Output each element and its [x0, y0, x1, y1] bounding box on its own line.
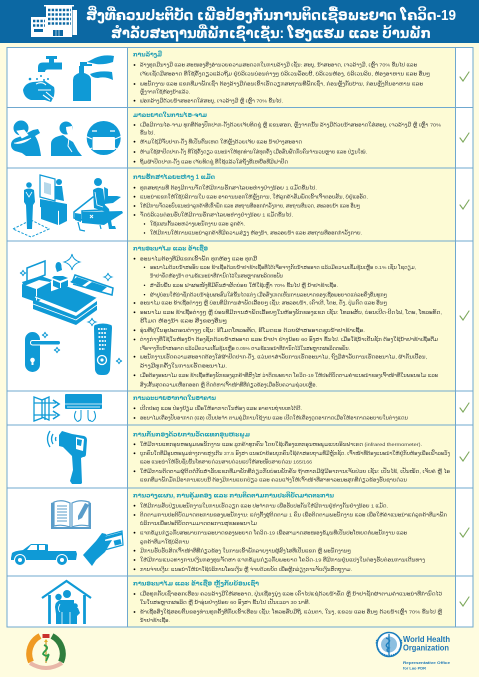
- bullet list: ໃຫ້ມີການແນວທາງການເງິນກອງທຸນຈັດຫາ ແຈກຂໍ້ມູນກ່ຽວກັບພະຍາດ ໂຄວິດ-19 ທີ່ມີການຢຸ່ນແປງໃນຕ່ອງຮັບຕ່ອນການເດີນທາງ: [140, 557, 426, 564]
- bullet list: [134, 502, 447, 573]
- bullet list: ບໍລິການເພື່ອປະຕິບັດຕາມມາດຕະການສຸຂະອະນາໄມ: [140, 519, 258, 527]
- bullet list: ແຂກທີ່ມາພັກມັກມີອາການແບບນີ້ ຕ້ອງມີການແຍກປ່ຽວ ແລະ ຄວນແຈ້ງໃຫ້ເຈົ້າໜ້າທີ່ສາທາລະນະສຸກທີ່ກ່ຽວຂ້ອງຮັບຊາບດ່ວນ: [140, 477, 407, 484]
- bullet list: ໃຫ້ມີການຈັດລະບົບແນະນຳລູກຄ້າທີ່ເຂົ້າພັກ ແລະ ສະຖານທີ່ອອກກຳລັງກາຍ, ສະຖານທີ່ນວດ, ສະລອຍນໍ້າ ແລະ ອື່ນໆ: [140, 203, 360, 210]
- bullet list: [134, 254, 442, 388]
- organization name: Representative Office: [403, 660, 451, 665]
- bullet list: ພະນັກງານເຮັດຄວາມສະອາດຕ້ອງໃສ່ຜ້າປິດປາກ-ດັງ, ແວ່ນຕາສຳລັບການເຮັດອະນາໄມ, ຖົງມືສຳລັບການເຮັດອະນາໄມ, ຜ້າກັນເປື້ອນ,: [140, 352, 427, 360]
- bullet list: ເປີດປະຕູ ແລະ ປ່ອງຢ້ຽມ ເພື່ອໃຫ້ອາກາດໃນຫ້ອງ ແລະ ອາຄານຖ່າຍເທໄດ້ດີ.: [140, 404, 302, 412]
- icon: pickup truck: [11, 544, 77, 566]
- bullet list: ລ້າງທຸກມືນາງມື ແລະ ສະໜອງສິ່ງອຳນວຍຄວາມສະດວກໃນການລ້າງມື ເຊັ່ນ: ສະບູ, ນໍ້າສະອາດ, ເຈວລ້າງມື, ເຫຼົ້າ 70% ຂຶ້ນໄປ ແລະ: [140, 61, 417, 69]
- bullet list: ໃຫ້ມີການແທກອຸນຫະພູມພະນັກງານ ແລະ ລູກຄ້າທຸກຄົນ ໂດຍໃຊ້ເຄື່ອງແທກອຸນຫະພູມແບບອິນຟາເຣດ (infrared thermometer).: [140, 441, 422, 448]
- bullet list: [134, 590, 443, 624]
- icon: air conditioner: [65, 394, 102, 422]
- text block: [133, 578, 443, 624]
- bullet list: ໃຫ້ມີການໃຫ້ການແນະນຳລູກຄ້າທີ່ມີຄວາມສ່ຽງ ຫ້ອງນ້ຳ, ສະລອຍນໍ້າ ແລະ ສະຖານທີ່ອອກກຳລັງກາຍ.: [150, 230, 362, 237]
- bullet list: ຈັດບໍລິເວນຕ່ອນຮັບໃຫ້ມີການຮັກສາໄລຍະຫ່າງຢ່າງນ້ອຍ 1 ແມັດຂຶ້ນໄປ.: [140, 211, 293, 219]
- icon: soap dispenser and hands: [73, 55, 114, 101]
- panel: temperature screening: [7, 425, 473, 488]
- title: ສິ່ງທີ່ຄວນປະຕິບັດ ເພື່ອປ້ອງກັນການຕິດເຊື້ອພະຍາດ ໂຄວິດ-19: [86, 6, 456, 24]
- organization name: World Health: [403, 634, 450, 644]
- bullet list: ທຸກສະຖານທີ່ ຕ້ອງມີການຈັດໃຫ້ມີການຮັກສາໄລຍະຫ່າງຢ່າງນ້ອຍ 1 ແມັດຂຶ້ນໄປ.: [140, 183, 317, 191]
- heading: ການລ້າງມື: [133, 50, 163, 58]
- icon: hand with payment card: [83, 531, 123, 566]
- bullet list: ອະນາໄມດ້ວຍນໍ້າສະອັບ ແລະ ຂ້າເຊື້ອດ້ວຍນໍ້າຢາຂ້າເຊື້ອທີ່ໄດ້ເຈືອຈາງກັບນໍ້າສະອາດ ແລ້ວມີຄວາມເຂັ້ມຂຸ້ນເຫຼືອ 0.1% ເຊັ່ນ ໂຊດຽມ,: [150, 263, 416, 271]
- icon: WHO globe emblem: [376, 632, 402, 656]
- bullet list: ຂຶ້ນໄປ.: [140, 129, 155, 137]
- logo: World Health Organization: [376, 632, 451, 670]
- bullet list: ລ້າງມືທຸກຄັ້ງໃນການເຮັດອະນາໄມ.: [140, 362, 227, 370]
- heading: ການຮັກສາໄລຍະຫ່າງ 1 ແມັດ: [133, 172, 215, 181]
- bullet list: ສຳລັບພື້ນ ແລະ ຝາຜະໜັງທີ່ມີຄົນສຳຜັດບ່ອຍ ໃຫ້ໃຊ້ເຫຼົ້າ 70% ຂຶ້ນໄປ ຫຼື ນໍ້າຢາຂ້າເຊື້ອ.: [150, 281, 338, 289]
- organization name: [403, 634, 451, 670]
- bullet list: ຕ່າງກ່າງທີ່ໃຊ້ໃນຫ້ອງນໍ້າ ຕ້ອງຊັກດ້ວຍນໍ້າສະອາດ ແລະ ນໍ້າຢາ ຢ່າງນ້ອຍ 60 ອົງສາ ຂຶ້ນໄປ. ເມື່ອໃຊ້ນໍ້າເຢັນຊັກ ຕ້ອງໃຊ້ນໍ້າຢາຂ້າເຊື້ອຕື່ມ: [140, 335, 439, 343]
- heading: ການອະນາໄມ ແລະ ຂ້າເຊື້ອ ຫຼັງກັບບ້ອນເຊົ່າ: [133, 578, 259, 588]
- icon: remote control: [94, 324, 112, 375]
- check mark: [460, 597, 469, 606]
- icon: hotel building: [31, 5, 77, 37]
- bullet list: ເມື່ອທຸກກັບເຊົ່າອອກເຮືອນ ຄວນລ້າງມືໃຫ້ສະອາດ, ປຸ່ນເຊື່ອງນຸ່ງ ແລະ ເຄົາໄປແຊ່ດ້ວຍນໍ້າຂັດ ຫຼື ນໍ້າຢາຊັກຜ້າຕາມຄຳແນະນຳທີ່ກຳນົດໄວ້: [140, 590, 442, 598]
- check mark: [460, 528, 469, 537]
- icon: door handle: [25, 332, 60, 372]
- bullet list: ນໍ້າຢາຂ້າເຊື້ອ.: [140, 617, 170, 624]
- icon: infrared thermometer: [48, 431, 87, 484]
- text block: [133, 490, 447, 573]
- heading: ການກັ່ນກອງດ້ວຍການວັດແທກອຸນຫະພູມ: [133, 430, 250, 440]
- bullet list: ໃຫ້ມີການຕິດຕາມຜູ້ຕິດຕໍ່ກັບສຳລັບແຂກທີ່ມາພັກທີ່ກ່ຽວກັບບ່ອນພັກຄັນ ຖ້າຫາກມີຜູ້ມີອາການເຈັບປ່ວຍ ເຊັ່ນ: ເປັນໄຂ້, ເປັນໝັດ, ເຈັບຄໍ ຫຼື ໄອ: [140, 467, 450, 475]
- panel: ventilation: [7, 391, 473, 425]
- icon: person coughing into elbow: [11, 120, 41, 156]
- header banner: [0, 0, 479, 43]
- panel: cleaning with guests at home: [7, 576, 473, 627]
- text block: [133, 430, 451, 484]
- bullet list: ສິ່ງເສັ້ນສຸດຄວາມເຫື່ອກອອກ ຫຼື ຕິດຕໍ່ຫາເຈົ້າໜ້າທີ່ທີ່ກ່ຽວຂ້ອງເມື່ອຮັບຄວາມຊ່ວຍເຫຼືອ.: [140, 381, 317, 388]
- organization name: for Lao PDR: [403, 666, 426, 670]
- bullet list: [134, 183, 368, 237]
- bullet list: ເມື່ອຕ້ອງອະນາໄມ ແລະ ຂ້າເຊື້ອຫ້ອງພັກຂອງລູກຄ້າທີ່ສົງໄສ ວ່າຕິດພະຍາດ ໂຄວິດ-19 ໃຫ້ປະຕິບັດຕາມຄຳແນະນຳຂອງເຈົ້າໜ້າທີ່ໃນພະນະໄມ ແລະ: [140, 371, 438, 379]
- text block: [133, 111, 442, 166]
- bullet list: [134, 441, 451, 484]
- title: [86, 6, 456, 42]
- bullet list: ໃຫ້ມີການສັບປ່ຽນພະນັກງານໃນການເຮັດວຽກ ແລະ ປະຈຳການ ເພື່ອຮັບປະກັນໃຫ້ມີການຢູ່ຫ່າງກັນຢ່າງນ້ອຍ 1 ແມັດ.: [140, 502, 388, 509]
- title: ສຳລັບສະຖານທີ່ພັກເຊົ່າເຊັ່ນ: ໂຮງແຮມ ແລະ ບ້ານພັກ: [111, 24, 431, 42]
- heading: ມາລະຍາດໃນການໄອ-ຈາມ: [133, 111, 207, 119]
- logo: Lao Ministry of Health emblem: [29, 634, 63, 668]
- icon: family in house: [42, 581, 91, 624]
- bullet list: ຂ້າເຊື້ອສິ່ງໃຊ້ສອຍຕົ້ນຂອງທ່ານທຸກຄັ້ງທີ່ກັບເຂົ້າເຮືອນ ເຊັ່ນ: ໂທລະສັບມືຖື, ແວ່ນຕາ, ໃນງ, ແຂວນ ແລະ ອື່ນໆ ດ້ວຍນໍ້າເຫຼົ້າ 70% ຂຶ້ນໄປ ຫຼື: [140, 608, 443, 616]
- icon: air flow vent: [34, 397, 59, 421]
- check mark: [460, 403, 469, 412]
- bullet list: ເມື່ອມີການໄອ-ຈາມ ທຸກທີ່ຕ້ອງປົກປາກ-ດັງດ້ວຍເຈ້ຍທິດຊູ່ ຫຼື ແຂນສອກ, ຫຼັງຈາກນັ້ນ ລ້າງມືດ້ວຍນໍ້າສະອາດໃສ່ສະບູ, ເຈວລ້າງມື ຫຼື ເຫຼົ້າ 70%: [140, 121, 442, 129]
- icon: hotel room furniture: [22, 261, 113, 325]
- organization name: Organization: [403, 642, 449, 652]
- check mark: [460, 72, 469, 81]
- text block: [133, 244, 442, 388]
- bullet list: ອະນາໄມຕ້ອງທີ່ມີແຂກເຂົ້າພັກ ທຸກຫ້ອງ ແລະ ທຸກມື້: [140, 254, 258, 262]
- text block: [133, 50, 430, 104]
- bullet list: ຖິ້ມຜ້າປິດປາກ-ດັງ ແລະ ເຈ້ຍທິດຊູ່ ທີ່ໃຊ້ແລ້ວໃສ່ຖັງຂີ້ເຫຍື້ອທີ່ມີຝາປິດ: [140, 158, 288, 166]
- icon: reception desk with distancing: [13, 175, 67, 237]
- bullet list: ຜ້າປູບ່ອນໃຫ້ນຳຊັກດ້ວຍນໍ້າອຸ່ນຜະສົມໃສ່ຂັ້ນໄດແຕ່ງ ເມື່ອສັງເກດເຫັນການລະບາດຂອງເຊື້ອພະຍາດແຕ່ລະຄົ້ງຂຶ້ນທຸກໆ: [150, 290, 387, 298]
- bullet list: [134, 404, 408, 422]
- bullet list: ມີການຮັບຮັບສິດເຈົ້າໜ້າທີ່ທີ່ກ່ຽວຂ້ອງ ໃນການເຂົ້າພັກລາຍງານຜູ້ສົງໄສທີ່ເປັນແຂກ ຫຼື ພະນັກງານໆ: [140, 546, 351, 554]
- icon: sparkles: [20, 254, 122, 364]
- bullet list: ໃນໃບສະຫຼາກຜະລິດ ຫຼື ນໍ້າອຸ່ນຢ່າງນ້ອຍ 60 ອົງສາ ຂຶ້ນໄປ ເປັນເວລາ 30 ນາທີ.: [140, 598, 310, 606]
- bullet list: ຫ້າມໃຊ້ຜ້າປິດປາກ-ດັງ ທີ່ໃຊ້ຄັ້ງດຽວ ແນະນຳໃຫ້ທຸກທ່ານໃສ່ທຸກຄັ້ງ ເມື່ອສັນຜັດກັບຄົນຈຳນວນຫຼາຍ ແລະ ປ່ຽນໃໝ່.: [140, 148, 367, 156]
- bullet list: ຕິດຕາມການປະຕິບັດມາດຕະການຂອງພະນັກງານ: ແຕ່ງຕັ້ງຜູ້ຕິດຕາມ 1 ຄົນ ເພື່ອຕິດຕາມພະນັກງານ ແລະ ເພື່ອໃຫ້ຄຳແນະນຳແກ່ລູກຄ້າທີ່ມາພັກ: [140, 512, 447, 519]
- bullet list: ເຈ້ຍເຊັດມືສະອາດ ທີ່ໃຊ້ຄັ້ງດຽວແລ້ວຖິ້ມ ຢູ່ບໍລິເວນບ່ອນຕ່າງໆ ບໍລິເວນລັອບບີ້, ບໍລິເວນຫ້ອງ, ບໍລິເວນລິບ, ຫ້ອງອາຫານ ແລະ ອື່ນໆ: [140, 71, 430, 78]
- bullet list: ນໍ້າຢາຂັດຫ້ອງນໍ້າ ຕາມຂໍ້ແນະນຳທີ່ກຳນົດໄວ້ໃນສະຫຼາກຜະລິດຕະພັນ: [150, 272, 283, 280]
- bullet list: [134, 121, 442, 166]
- bullet list: ແນະນຳແຂກໃຫ້ໃຊ້ບໍລິການໃນ ແລະ ອາຄານນອກໃຫ້ຫຼັງການ, ໃຫ້ລູກຄ້າສັມພັດເຂົ້າເຈົ້າຕອບສັນ, ບໍ່ຢູ່ແອອັດ.: [140, 193, 368, 200]
- check mark: [460, 200, 469, 209]
- panel: hand washing: [7, 48, 473, 108]
- bullet list: ຫຼັງຈາກໃຊ້ຫ້ອງນໍ້າແລ້ວ.: [140, 88, 190, 95]
- heading: ການວາງແຜນ, ການຄຸ້ມຄອງ ແລະ ການຕິດຕາມການປະຕິບັດມາດຕະການ: [133, 490, 334, 500]
- bullet list: ລູກຄ້າທີ່ມາໃຊ້ບໍລິການ: [140, 538, 189, 545]
- bullet list: ບຸກຄົນໃດທີ່ມີອຸນຫະພູມຮ່າງກາຍສູງເກີນ 37.5 ອົງສາ ແນະນຳຍ້ອນບຸກຄົນໃຊ້ຄຳສອບຖາມທີ່ມີຫຼັກຊັດ. ເຈົ້າໜ້າທີ່ຕ້ອງແນະນຳໃຫ້ຢູ່ກັບຫ້ອງເພື່ອເຝົ້າລະວັງ: [140, 450, 451, 457]
- bullet list: ເຈືອຈາງກັບນໍ້າສະອາດ ແລ້ວມີຄວາມເຂັ້ມຂຸ້ນເຫຼືອ 0.05% ຕາມຂໍ້ແນະນຳທີ່ກຳນົດໄວ້ໃນສະຫຼາກຜະລິດຕະພັນ.: [140, 344, 350, 352]
- bullet list: ການຈ່າຍເງິນ: ແນະນຳໃຫ້ນຳໃຊ້ບໍລິການໂອນເງິນ ຫຼື ຈ່າຍດ້ວຍບັດ ເພື່ອຫຼີກລ່ຽງການຈັບເງິນສົດຖຸງາມ.: [140, 566, 352, 573]
- check mark: [460, 452, 469, 461]
- panel: cleaning and disinfecting: [7, 241, 473, 391]
- check mark: [460, 311, 469, 320]
- panel: planning and policies: [7, 488, 473, 576]
- bullet list: ຫ້າມໃຊ້ມືຈັບປາກ-ດັງ ທີ່ເປັນຕົ້ນເຫດ ໃຫ້ຫຼັງດ້ວຍເຈ້ຍ ແລະ ນໍ້າຢ່າງສະອາດ: [140, 138, 302, 145]
- bullet list: ໃຊ້ແຜນກັ້ນລະຫວ່າງພະນັກງານ ແລະ ລູກຄ້າ.: [150, 221, 245, 228]
- bullet list: ຟອກລ້າງມືດ້ວຍນໍ້າສະອາດໃສ່ສະບູ, ເຈວລ້າງມື ຫຼື ເຫຼົ້າ 70% ຂຶ້ນໄປ.: [140, 96, 283, 104]
- panel: physical distancing: [7, 168, 473, 241]
- bullet list: ແຈກຂໍ້ມູນກ່ຽວກັບສະພາບການລະບາດຂອງພະຍາດ ໂຄວິດ-19 ເພື່ອສາມາດສະໜອງຂໍ້ມູນທີ່ເປັນປະໂຫຍດຕໍ່ພະນັກງານ ແລະ: [140, 529, 407, 536]
- text block: [133, 172, 368, 237]
- bullet list: ອະນາໄມເຄື່ອງປັບອາກາດ (ແອ) ເປັນປະຈຳ ຕາມຄູ່ມືການໃຊ້ງານ ແລະ ເປີດໃຫ້ເຄື່ອງດູດອາກາດເມື່ອໃຫ້ອາກາດລະບາຍໃນຕ່າງແດນ: [140, 414, 408, 422]
- bullet list: ອະນາໄມ ແລະ ຂ້າເຊື້ອຕ່າງໆ ຫຼື ບ່ອນທີ່ມີການສຳພັດເລື້ອຍໆ ເຊັ່ນ: ສະລອຍນໍ້າ, ເຄົາເຕີ, ໂຕະ, ຕັ່ງ, ປຸ່ມກົດ ແລະ ອື່ນໆ: [140, 299, 387, 307]
- bullet list: ຣີໂມດ ຫ້ອງນໍ້າ ແລະ ສິ່ງຂອງອື່ນໆ: [140, 317, 227, 324]
- icon: seated person on bench: [74, 178, 123, 231]
- bullet list: ແລະ ແນະນຳໃຫ້ຮັບຊັບນັ້ນໂທສາຍດ່ວນສາຍດ່ວນແປໃຫ້ສະໜັບສາຍດ່ວນ 165/166: [140, 458, 312, 465]
- bullet list: ອະນາໄມ ແລະ ຂ້າເຊື້ອຕ່າງໆ ຫຼື ບ່ອນທີ່ມີການສຳພັດເລື້ອຍໆໃນຫ້ອງພັກຂອງແຂກ ເຊັ່ນ: ໂທລະສັບ, ບ່ອນເປີດ-ປິດໄຟ, ໂຕະ, ໂທລະທັດ,: [140, 308, 442, 316]
- heading: ການອະນາໄມ ແລະ ຂ້າເຊື້ອ: [133, 244, 208, 252]
- icon: notebook and pencil: [51, 501, 91, 529]
- panel: respiratory etiquette: [7, 108, 473, 168]
- icon: face mask: [85, 121, 122, 155]
- icon: washing hands under tap: [23, 56, 62, 102]
- text block: [133, 394, 408, 422]
- check mark: [460, 133, 469, 142]
- heading: ການລະບາຍອາກາດໃນອາຄານ: [133, 394, 216, 402]
- bullet list: ພະນັກງານ ແລະ ແຂກທີ່ມາພັກເຊົ່າ ຕ້ອງລ້າງມືກ່ອນເຂົ້າເຮັດວຽກສະຖານທີ່ພັກເຊົ່າ, ກ່ອນຫຼັງກັບບ້ານ, ກ່ອນຫຼັງກິນອາຫານ ແລະ: [140, 81, 423, 88]
- bullet list: [134, 61, 430, 104]
- bullet list: ອຸ່ນທີ່ຢູ່ໃນອຸປະກອນຕ່າງໆ ເຊັ່ນ: ຣີໂມດໂທລະທັດ, ຣີໂມດແອ ດ້ວຍຜ້າສະອາດຊຸບນໍ້າຢາຂ້າເຊື້ອ.: [140, 327, 365, 334]
- icon: person coughing into tissue: [51, 122, 82, 156]
